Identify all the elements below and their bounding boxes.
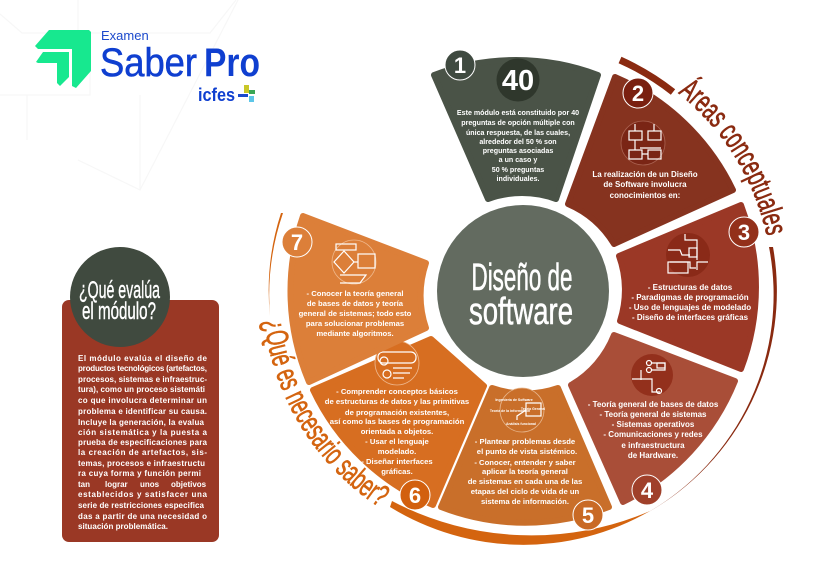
body text: objetivos (171, 480, 207, 489)
text: 50 % preguntas (492, 166, 544, 174)
panel 5: systemic problems (441, 388, 609, 530)
badge 3: 3 (738, 220, 750, 245)
badge 6: 6 (409, 483, 421, 508)
text: preguntas de opción múltiple con (461, 119, 575, 127)
logo text: icfes: icfes (198, 85, 235, 105)
text: de bases de datos y teoría (307, 299, 404, 308)
icon: systems diagram (631, 354, 673, 396)
badge 2: 2 (632, 81, 644, 106)
body text: tan (78, 480, 90, 489)
body text: productos tecnológicos (artefactos, (78, 364, 207, 373)
text (299, 289, 412, 338)
body text: tura), como un proceso sistemáti (78, 385, 205, 394)
body text: unos (140, 480, 160, 489)
badge 5 (573, 500, 603, 530)
text: - Diseñar interfaces (361, 457, 433, 466)
text: - Plantear problemas desde (475, 437, 576, 446)
text (325, 387, 469, 476)
panel 1: number of questions (434, 50, 598, 199)
icon: systems theory diagram: Teoría de la información (490, 409, 530, 413)
body text: El módulo evalúa el diseño de (78, 354, 208, 363)
body text: lograr (105, 480, 128, 489)
badge 7 (282, 227, 312, 257)
body text: prueba de especificaciones para (78, 438, 208, 447)
body text: co que involucra determinar un (78, 396, 207, 405)
heading circle: el módulo? (82, 298, 156, 325)
text: única respuesta, de las cuales, (466, 129, 570, 137)
central circle: Diseño de software: software (469, 291, 573, 333)
body text: procesos, sistemas e infraestruc- (78, 375, 207, 384)
panel 6: data structures concepts (313, 339, 484, 510)
badge 5: 5 (582, 503, 594, 528)
heading circle (70, 247, 170, 347)
panel 7: database theory (282, 216, 426, 382)
badge 1 (445, 50, 475, 80)
panel 2: software design intro (568, 77, 733, 244)
text: etapas del ciclo de vida de un (471, 487, 580, 496)
panel 4: systems theory (571, 335, 735, 505)
text: de Hardware. (628, 451, 678, 460)
icon: icfes star (238, 85, 255, 102)
text: - Sistemas operativos (612, 420, 695, 429)
central circle: Diseño de software (437, 205, 609, 377)
text: - Comunicaciones y redes (603, 430, 703, 439)
decorative arcs (269, 60, 777, 545)
text: aplicar la teoría general (482, 467, 568, 476)
text: orientada a objetos. (361, 427, 433, 436)
40 circle: 40 (502, 65, 534, 97)
logo text: Pro: Pro (204, 41, 260, 85)
panel 3: data structures (619, 205, 759, 369)
text: - Diseño de interfaces gráficas (632, 313, 749, 322)
body text: la creación de artefactos, sis- (78, 448, 207, 457)
icon: systems theory diagram (490, 388, 545, 432)
text: - Paradigmas de programación (631, 293, 749, 302)
text: - Conocer la teoría general (307, 289, 403, 298)
text: de estructuras de datos y las primitivas (325, 397, 469, 406)
badge 2 (623, 78, 653, 108)
icon: systems theory diagram: Teoría General (521, 407, 545, 411)
text: - Teoría general de sistemas (599, 410, 707, 419)
text: La realización de un Diseño (592, 170, 698, 179)
text: general de sistemas; todo esto (299, 309, 412, 318)
badge 7: 7 (291, 230, 303, 255)
text: - Conocer, entender y saber (474, 458, 576, 467)
badge 6 (400, 480, 430, 510)
logo: Saber Pro (35, 28, 260, 105)
central circle: Diseño de software: Diseño de (472, 257, 572, 299)
text (588, 400, 719, 460)
body text (78, 354, 208, 531)
icon: modelling diagram (666, 233, 710, 277)
icon: flowchart (332, 240, 376, 284)
badge 4: 4 (641, 478, 654, 503)
text: el punto de vista sistémico. (477, 447, 577, 456)
text: - Estructuras de datos (648, 283, 733, 292)
body text: Incluye la generación, la evalua (78, 418, 205, 427)
icon: block diagram (621, 121, 665, 165)
panel: ¿Qué evalúa el módulo? (62, 247, 219, 542)
text: gráficas. (381, 467, 413, 476)
text: preguntas asociadas (483, 147, 553, 155)
text: e infraestructura (621, 441, 685, 450)
text: mediante algoritmos. (316, 329, 394, 338)
text: conocimientos en: (610, 191, 680, 200)
text (592, 170, 698, 200)
icon: systems theory diagram: Ingeniería de Software (495, 398, 533, 402)
text: individuales. (497, 175, 540, 183)
text: alrededor del 50 % son (479, 138, 557, 146)
icon: green arrows (35, 30, 91, 88)
text: - Uso de lenguajes de modelado (629, 303, 751, 312)
badge 3 (729, 217, 759, 247)
icon: interface form (375, 341, 419, 385)
text: de programación existentes, (345, 408, 449, 417)
text: así como las bases de programación (330, 417, 465, 426)
body text: establecidos y satisfacer una (78, 490, 208, 499)
text: - Usar el lenguaje (365, 437, 430, 446)
heading: ¿Qué es necesario saber?: ¿Qué es necesario saber? (259, 322, 390, 506)
text: de Software involucra (603, 180, 687, 189)
icon: systems theory diagram: Análisis funcional (506, 422, 536, 426)
body text: das a partir de una necesidad o (78, 512, 207, 521)
badge 4 (632, 475, 662, 505)
body text: serie de restricciones especifica (78, 501, 205, 510)
text: para solucionar problemas (306, 319, 404, 328)
text: de sistemas en cada una de las (468, 477, 582, 486)
text (468, 437, 582, 506)
body text: temas, procesos e infraestructu (78, 459, 205, 468)
text: - Comprender conceptos básicos (336, 387, 458, 396)
heading: Áreas conceptuales: Áreas conceptuales (678, 76, 784, 236)
logo text: Examen: Examen (101, 28, 149, 43)
heading circle: ¿Qué evalúa (79, 277, 160, 304)
body text: problema e identificar su causa. (78, 407, 207, 416)
text (629, 283, 751, 322)
body text: ción sistemática y la puesta a (78, 428, 208, 437)
badge 1: 1 (454, 53, 466, 78)
text: Este módulo está constituido por 40 (457, 109, 579, 117)
text (457, 109, 579, 183)
text: sistema de información. (481, 497, 569, 506)
text: modelado. (378, 447, 416, 456)
body text: ra cuya forma y función permi (78, 469, 201, 478)
text: - Teoría general de bases de datos (588, 400, 719, 409)
logo text: Saber: Saber (100, 41, 197, 85)
text: a un caso y (499, 156, 537, 164)
40 circle (496, 58, 540, 102)
body text: situación problemática. (78, 522, 168, 531)
